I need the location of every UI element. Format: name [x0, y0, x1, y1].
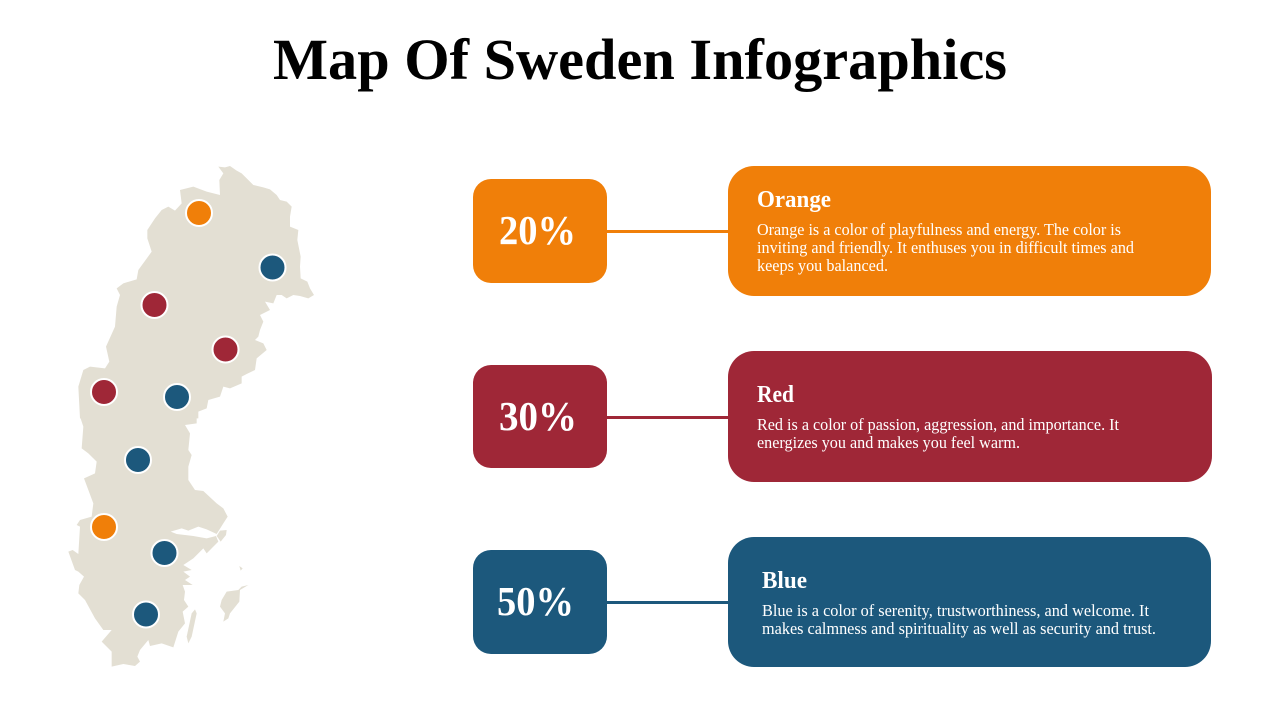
- heading: Red: Red: [757, 382, 795, 408]
- percent box: 30%: 30%: [499, 393, 577, 439]
- heading: Orange: Orange: [757, 187, 831, 213]
- map marker: blue: [152, 540, 178, 566]
- text: orange description: [757, 220, 1135, 275]
- percent box: 50%: [473, 550, 607, 654]
- title: Map Of Sweden Infographics: [273, 27, 1007, 92]
- panel: red: [728, 351, 1212, 482]
- text: orange description: Orange is a color of playfulness and energy. The color is: [757, 220, 1121, 239]
- map marker: blue: [125, 447, 151, 473]
- map: southern landmass: [68, 410, 228, 667]
- map marker: red: [212, 336, 238, 362]
- percent box: 30%: [473, 365, 607, 468]
- text: orange description: keeps you balanced.: [757, 256, 888, 275]
- row: blue: [473, 537, 1211, 667]
- percent box: 20%: 20%: [499, 207, 576, 253]
- row: orange: [473, 166, 1211, 296]
- map of Sweden: [68, 166, 314, 667]
- panel: orange: [728, 166, 1211, 296]
- map: northern landmass: [78, 166, 314, 418]
- connector: red: [607, 416, 728, 419]
- map marker: orange: [91, 514, 117, 540]
- map marker: orange: [186, 200, 212, 226]
- map marker: blue: [133, 602, 159, 628]
- text: red description: energizes you and makes you feel warm.: [757, 433, 1020, 452]
- connector: orange: [607, 230, 728, 233]
- text: orange description: inviting and friendly. It enthuses you in difficult times and: [757, 238, 1135, 257]
- percent box: 50%: 50%: [497, 578, 574, 624]
- map: Oland island: [187, 609, 197, 643]
- connector: blue: [607, 601, 728, 604]
- row: red: [473, 351, 1212, 482]
- text: blue description: makes calmness and spirituality as well as security and trust.: [762, 619, 1156, 638]
- map marker: blue: [164, 384, 190, 410]
- text: blue description: [762, 601, 1156, 638]
- map marker: red: [91, 379, 117, 405]
- heading: Blue: Blue: [762, 568, 807, 594]
- text: red description: [757, 415, 1119, 452]
- text: blue description: Blue is a color of serenity, trustworthiness, and welcome. It: [762, 601, 1149, 620]
- map marker: red: [142, 292, 168, 318]
- map marker: blue: [260, 254, 286, 280]
- text: red description: Red is a color of passion, aggression, and importance. It: [757, 415, 1119, 434]
- map: Gotland island: [220, 566, 248, 622]
- panel: blue: [728, 537, 1211, 667]
- percent box: 20%: [473, 179, 607, 283]
